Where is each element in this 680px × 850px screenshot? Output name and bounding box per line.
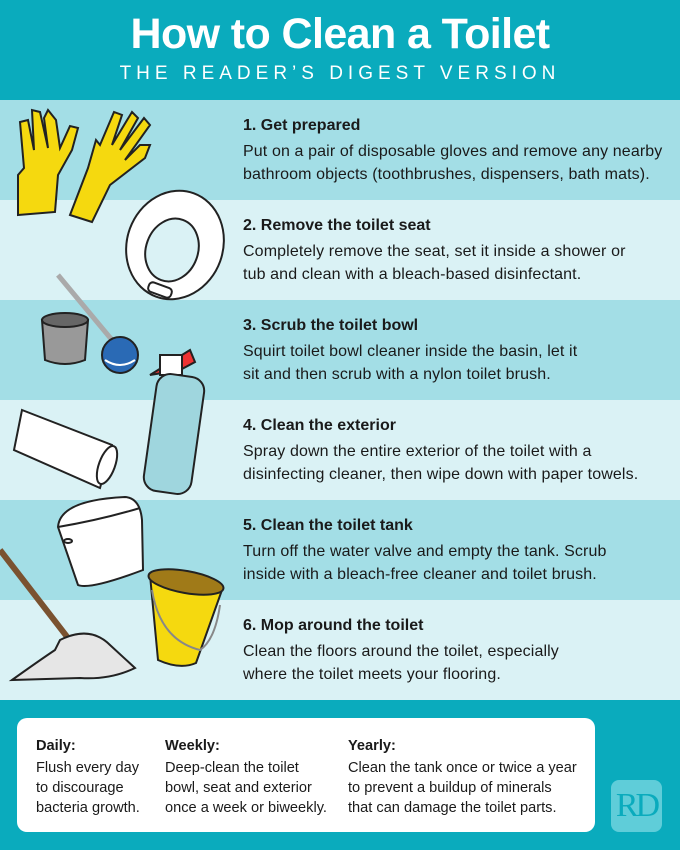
step 2 (243, 217, 626, 283)
step 3: Squirt toilet bowl cleaner inside the basin, let it (243, 343, 577, 360)
step 5: Turn off the water valve and empty the tank. Scrub (243, 543, 607, 560)
yearly: to prevent a buildup of minerals (348, 780, 552, 796)
frequency card (17, 718, 595, 832)
step 4 (243, 417, 638, 483)
title: How to Clean a Toilet (130, 10, 550, 58)
daily: bacteria growth. (36, 800, 140, 816)
step 1 (243, 117, 662, 183)
icon: spray bottle (142, 350, 206, 496)
step 5 (243, 517, 607, 583)
step 3 (243, 317, 578, 383)
subtitle: THE READER’S DIGEST VERSION (120, 63, 560, 84)
step 2: 2. Remove the toilet seat (243, 217, 431, 234)
icon: toilet brush and holder (42, 275, 138, 373)
icon: toilet tank (58, 497, 143, 586)
weekly: Deep-clean the toilet (165, 760, 299, 776)
icon: gloves (18, 110, 150, 222)
step 1: Put on a pair of disposable gloves and remove any nearby (243, 143, 662, 160)
step 6: 6. Mop around the toilet (243, 617, 423, 634)
step 3: 3. Scrub the toilet bowl (243, 317, 418, 334)
weekly: Weekly: (165, 738, 220, 754)
daily: Flush every day (36, 760, 139, 776)
step 4: Spray down the entire exterior of the toilet with a (243, 443, 592, 460)
step 3: sit and then scrub with a nylon toilet brush. (243, 366, 551, 383)
step 5: 5. Clean the toilet tank (243, 517, 413, 534)
step 6: where the toilet meets your flooring. (243, 666, 501, 683)
yearly: Clean the tank once or twice a year (348, 760, 577, 776)
logo: RD (611, 780, 662, 832)
step 6 (243, 617, 559, 683)
daily (36, 738, 140, 816)
step 1: 1. Get prepared (243, 117, 360, 134)
weekly: bowl, seat and exterior (165, 780, 312, 796)
daily: Daily: (36, 738, 76, 754)
weekly (165, 738, 327, 816)
header (0, 0, 680, 100)
illustrations (0, 108, 225, 682)
icon: bucket (147, 565, 225, 666)
daily: to discourage (36, 780, 124, 796)
step 1: bathroom objects (toothbrushes, dispensers, bath mats). (243, 166, 650, 183)
weekly: once a week or biweekly. (165, 800, 327, 816)
step 5: inside with a bleach-free cleaner and toilet brush. (243, 566, 597, 583)
yearly: Yearly: (348, 738, 396, 754)
logo: RD: RD (616, 787, 657, 824)
yearly (348, 738, 577, 816)
icon: mop (0, 550, 135, 680)
step 2: Completely remove the seat, set it inside a shower or (243, 243, 626, 260)
step 6: Clean the floors around the toilet, especially (243, 643, 559, 660)
icon: paper towel (14, 410, 121, 488)
step 4: 4. Clean the exterior (243, 417, 396, 434)
step 4: disinfecting cleaner, then wipe down with paper towels. (243, 466, 638, 483)
step 2: tub and clean with a bleach-based disinfectant. (243, 266, 581, 283)
icon: toilet seat (111, 177, 239, 313)
yearly: that can damage the toilet parts. (348, 800, 556, 816)
